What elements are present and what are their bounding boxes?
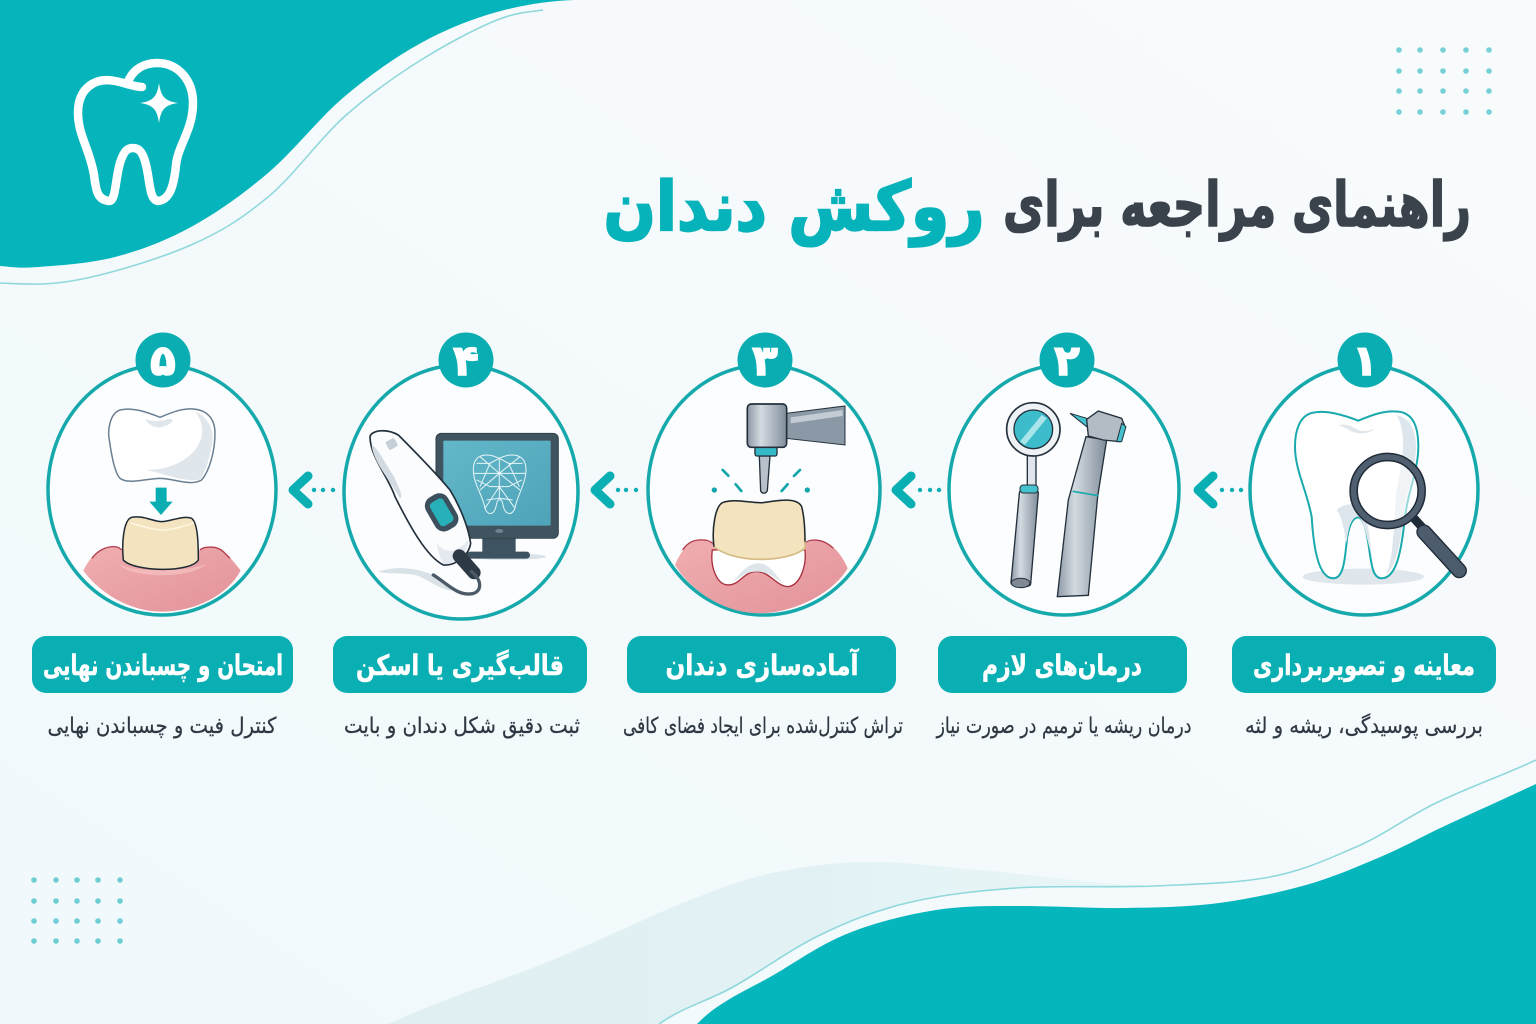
step 2 circle [949, 365, 1179, 615]
step 3 circle [648, 365, 880, 615]
step 3 icon: drill over prepared tooth [675, 404, 848, 613]
bottom pale wave [388, 862, 1154, 1024]
step 1 circle [1250, 365, 1478, 615]
step 3 heading pill [627, 636, 896, 693]
step 4 circle [344, 365, 578, 619]
step 3 panel: tooth preparation [623, 332, 903, 739]
step 1 description: بررسی پوسیدگی، ریشه و لثه [1245, 713, 1483, 739]
step 2 description: درمان ریشه یا ترمیم در صورت نیاز [936, 714, 1192, 739]
icon: tooth logo with sparkle [78, 63, 193, 201]
title: teal part: روکش دندان [604, 168, 984, 247]
step 4 heading pill: قالب‌گیری یا اسکن [356, 649, 564, 682]
top-left teal wave [0, 0, 574, 268]
step 4 number badge [438, 332, 494, 388]
step 2 heading pill [938, 636, 1187, 693]
step 1 icon: tooth with magnifier [1295, 411, 1459, 585]
step 3 number badge: ۳ [752, 336, 778, 385]
step 1 heading pill [1232, 636, 1496, 693]
step 2 heading pill: درمان‌های لازم [982, 649, 1142, 682]
step 3 number badge [738, 332, 792, 388]
step 5 heading pill [32, 636, 293, 693]
step 5 icon: crown over prepared tooth [83, 409, 241, 612]
step 4 icon: intraoral scanner and monitor [370, 431, 558, 594]
step 4 number badge: ۴ [453, 336, 479, 385]
step 4 heading pill [333, 636, 587, 693]
step 2 number badge: ۲ [1054, 336, 1080, 385]
arrow: step 3 to step 4 [595, 476, 638, 504]
arrow: step 4 to step 5 [293, 476, 335, 504]
step 5 description: کنترل فیت و چسباندن نهایی [48, 714, 277, 739]
step 1 number badge: ۱ [1352, 336, 1378, 385]
top wave accent line [0, 10, 543, 284]
step 5 circle [48, 365, 276, 615]
arrow: step 2 to step 3 [896, 476, 941, 504]
arrow: step 1 to step 2 [1198, 476, 1243, 504]
step 5 heading pill: امتحان و چسباندن نهایی [43, 649, 283, 682]
step 2 number badge [1040, 332, 1094, 388]
step 5 panel: try-in and final cementation [32, 332, 293, 739]
title [604, 168, 1471, 247]
step 1 number badge [1338, 332, 1392, 388]
step 3 heading pill: آماده‌سازی دندان [666, 648, 860, 682]
step 2 icon: dental mirror and handpiece [1007, 403, 1126, 597]
step 2 panel: necessary treatments [936, 332, 1192, 739]
step 1 panel: examination [1232, 332, 1496, 739]
dot pattern: top right [1396, 47, 1492, 115]
step 5 number badge: ۵ [150, 336, 176, 385]
dot pattern: bottom left [31, 877, 123, 944]
step 4 panel: impression or scan [333, 332, 587, 739]
step 3 description: تراش کنترل‌شده برای ایجاد فضای کافی [623, 714, 903, 739]
step 4 description: ثبت دقیق شکل دندان و بایت [344, 714, 580, 739]
bottom teal wave [697, 784, 1536, 1024]
step 5 number badge [136, 332, 190, 388]
bottom wave accent line [659, 760, 1536, 1024]
